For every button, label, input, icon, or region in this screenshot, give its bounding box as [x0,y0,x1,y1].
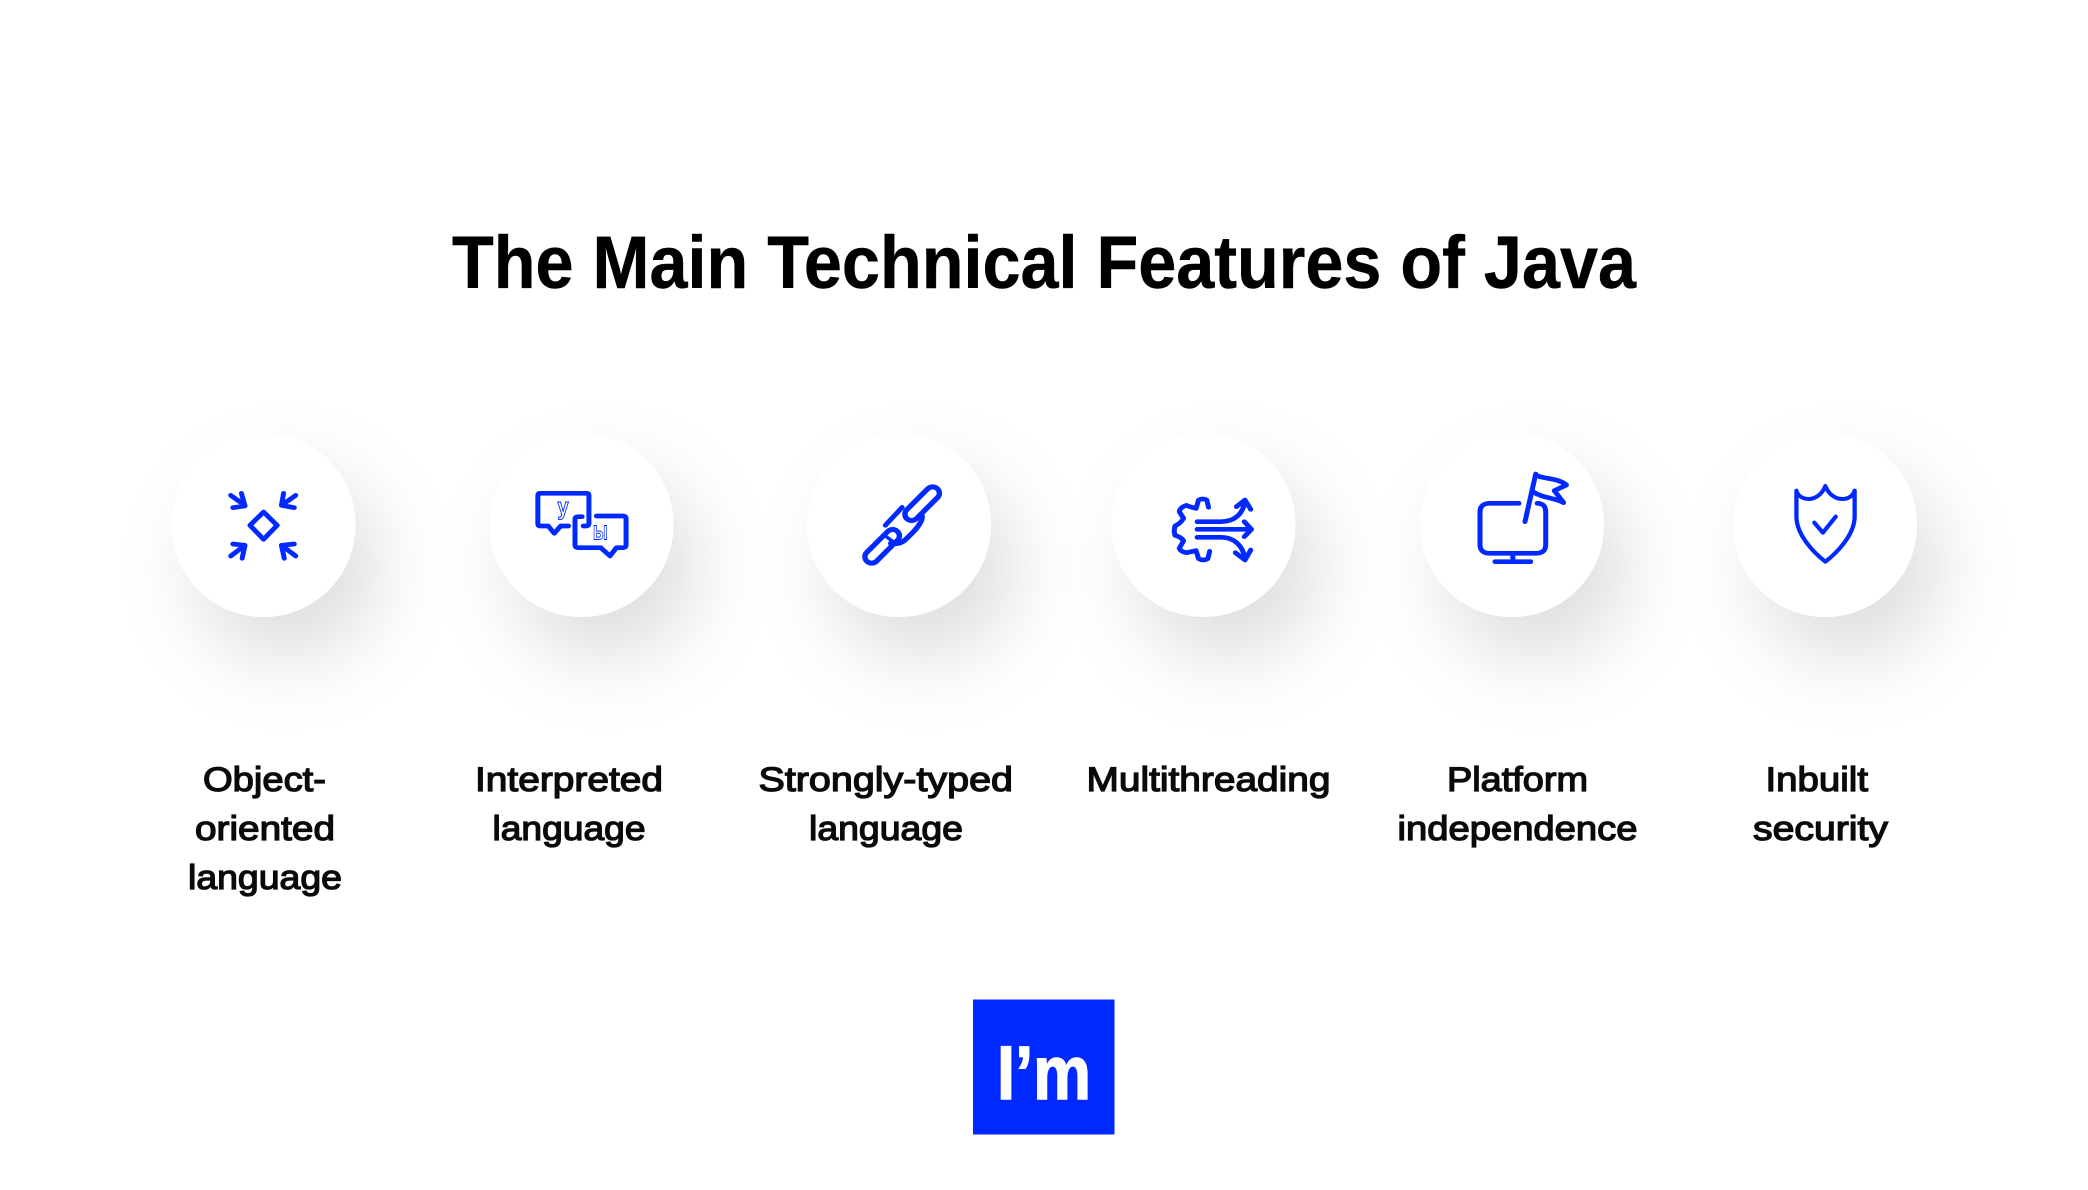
label: Strongly-typed [758,761,1013,799]
label: language [188,859,342,897]
icon: translation speech bubbles: у [557,494,569,519]
icon circle [1733,433,1917,617]
title: The Main Technical Features of Java [452,221,1637,304]
feature: multithreading [1086,433,1330,799]
icon: shield with check [1796,486,1855,562]
icon: chain links [862,484,942,566]
label: Multithreading [1086,761,1330,799]
icon circle [1420,433,1604,617]
label: Platform [1447,761,1588,799]
icon: arrows converging on diamond [231,493,296,558]
label [475,761,663,848]
icon: monitor with flag [1480,474,1566,562]
icon circle [1112,433,1296,617]
label [1398,761,1638,848]
label: Inbuilt [1766,761,1868,799]
feature: strongly-typed language [758,433,1013,848]
label: Object- [203,761,326,799]
label [1753,761,1889,848]
icon circle [807,433,991,617]
label [188,761,342,897]
feature: inbuilt security [1733,433,1917,848]
icon: gear with branching arrows [1174,499,1251,560]
logo [973,1000,1114,1134]
icon circle [172,433,356,617]
feature: interpreted language [475,433,674,848]
label: independence [1398,810,1638,848]
label: Interpreted [475,761,663,799]
logo: I’m [997,1031,1091,1116]
label: security [1753,810,1889,848]
label: oriented [195,810,335,848]
feature: object-oriented language [172,433,356,897]
label: language [809,810,963,848]
label [758,761,1013,848]
icon circle [490,433,674,617]
feature: platform independence [1398,433,1638,848]
icon: translation speech bubbles [538,493,626,556]
label: language [492,810,646,848]
icon: translation speech bubbles: ы [593,515,608,545]
